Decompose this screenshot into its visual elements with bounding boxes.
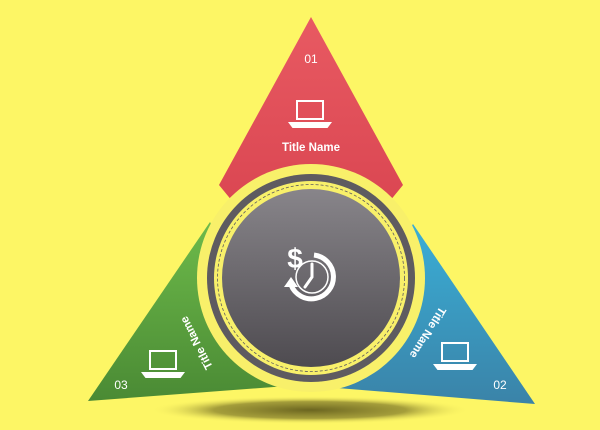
icon: dollar clock [284,243,333,299]
icon: laptop 01 [290,101,330,127]
number 03: 03 [114,378,128,392]
icon: dollar clock: $ [287,243,303,274]
shadow [150,396,470,424]
number 02: 02 [493,378,507,392]
center circle [197,164,425,392]
title 01: Title Name [282,142,340,154]
title 02: Title Name [407,304,448,360]
panel: 03 green [88,222,300,401]
panel: 02 blue [300,224,535,404]
title 03: Title Name [179,314,216,371]
icon: laptop 02 [435,343,475,369]
panel: 01 red [219,17,403,235]
icon: laptop 03 [143,351,183,377]
number 01: 01 [304,52,318,66]
